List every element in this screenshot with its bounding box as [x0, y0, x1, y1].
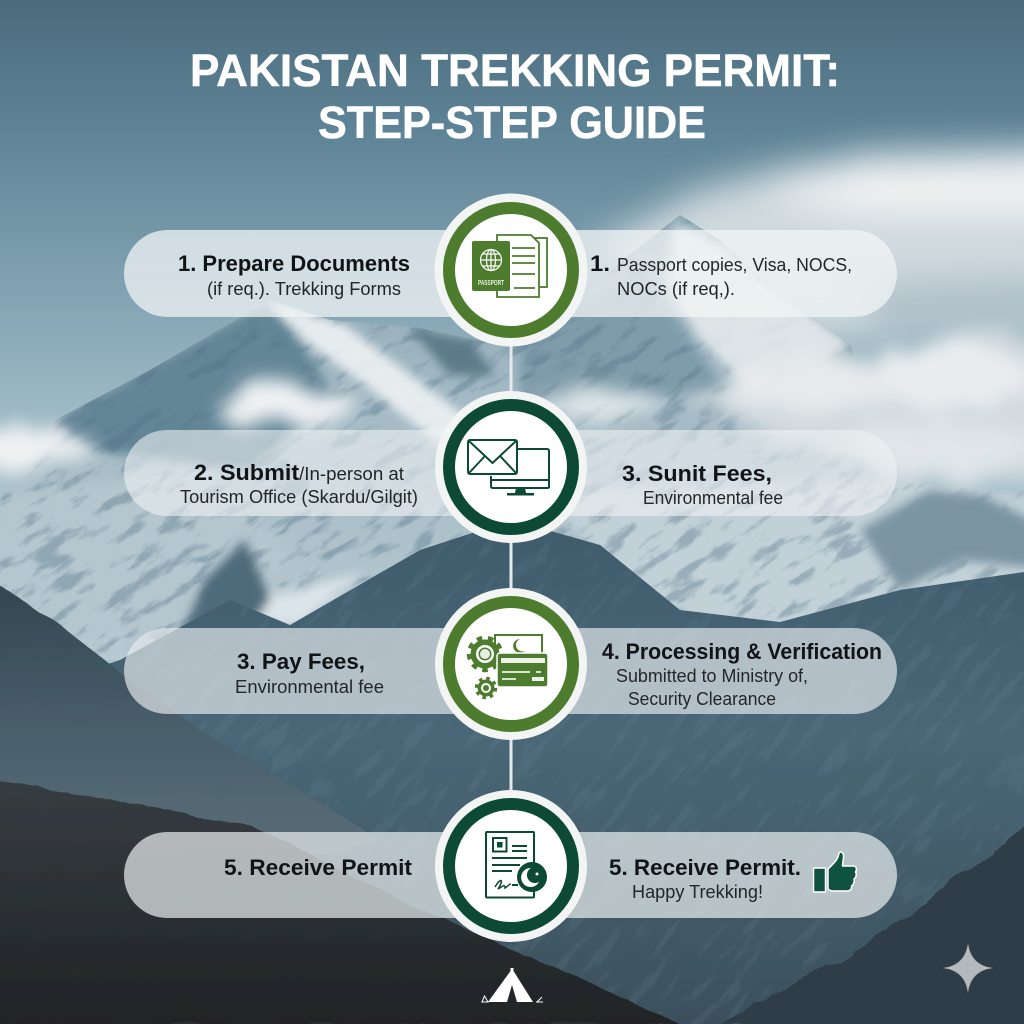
row 1 right text — [590, 251, 852, 299]
row 3 left text: 3. Pay Fees, — [237, 649, 365, 674]
icon badge: gears, money and card — [435, 588, 587, 740]
row 1 left text — [178, 251, 410, 299]
row 2 pill — [124, 430, 897, 516]
icon: tent — [482, 968, 543, 1002]
row 4 pill — [124, 832, 897, 918]
passport label: PASSPORT — [478, 278, 504, 287]
banknote — [495, 635, 542, 657]
large gear — [469, 638, 501, 670]
row 1 right text: NOCs (if req,). — [617, 279, 735, 299]
passport — [472, 241, 510, 291]
small gear — [476, 678, 496, 698]
row 1 left text: 1. Prepare Documents — [178, 251, 410, 276]
row 1 right text: 1. — [590, 251, 610, 276]
row 2 right text: Environmental fee — [643, 488, 783, 508]
row 3 pill — [124, 628, 897, 714]
row 2 right text: 3. Sunit Fees, — [622, 461, 772, 486]
row 1 pill — [124, 230, 897, 317]
row 3 right text: Security Clearance — [628, 689, 776, 709]
panel: step row 4 — [124, 832, 897, 918]
connector line — [510, 340, 512, 840]
passport globe — [480, 250, 502, 270]
icon badge: passport and documents — [434, 194, 588, 346]
row 1 left text: (if req.). Trekking Forms — [207, 279, 401, 299]
document sheets — [497, 235, 547, 297]
panel: step row 2 — [124, 430, 897, 516]
row 4 left text: 5. Receive Permit — [224, 855, 412, 880]
envelope — [468, 440, 517, 474]
row 3 left text: Environmental fee — [235, 677, 384, 697]
crescent seal — [517, 862, 547, 892]
row 3 left text — [235, 649, 384, 697]
row 4 right text — [609, 855, 801, 902]
icon: thumbs up — [814, 852, 856, 892]
row 2 right text — [622, 461, 783, 508]
icon badge: envelope and computer — [435, 391, 587, 543]
computer monitor — [491, 449, 549, 488]
document lines — [512, 248, 535, 288]
title: PAKISTAN TREKKING PERMIT: — [190, 45, 840, 96]
panel: step row 3 — [124, 628, 897, 714]
credit card — [497, 653, 548, 687]
row 3 right text: 4. Processing & Verification — [602, 639, 882, 664]
permit document — [486, 832, 534, 898]
row 1 right text: Passport copies, Visa, NOCS, — [617, 255, 852, 275]
icon: sparkle watermark — [943, 943, 993, 993]
row 3 right text: Submitted to Ministry of, — [616, 666, 808, 686]
row 4 right text: Happy Trekking! — [632, 882, 763, 902]
row 2 left text: Tourism Office (Skardu/Gilgit) — [180, 487, 418, 507]
row 2 left text: 2. Submit/In-person at — [194, 460, 404, 485]
row 3 right text — [602, 639, 882, 709]
panel: step row 1 — [124, 230, 897, 317]
row 4 right text: 5. Receive Permit. — [609, 855, 801, 880]
monitor stand — [507, 488, 534, 496]
title: STEP-STEP GUIDE — [318, 97, 706, 148]
title — [190, 45, 840, 148]
icon badge: signed permit with crescent seal — [435, 790, 587, 942]
row 2 left text — [180, 460, 418, 507]
